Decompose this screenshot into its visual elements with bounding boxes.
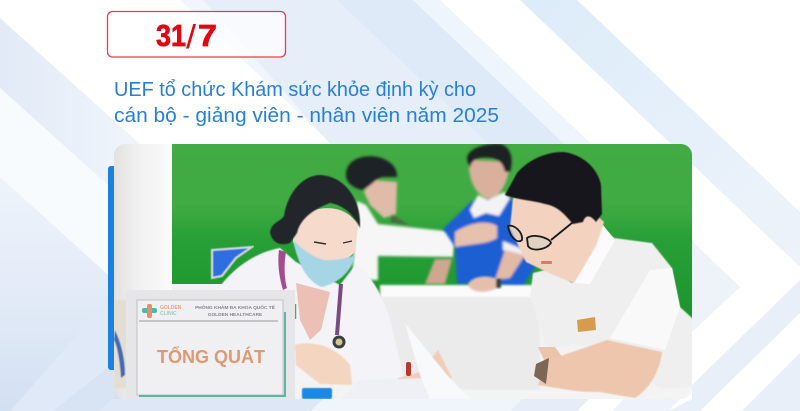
date text: 31 <box>156 18 186 53</box>
clinic name: PHÒNG KHÁM ĐA KHOA QUỐC TẾ <box>195 303 276 311</box>
desk sign: GOLDEN HEALTHCARE <box>208 312 263 318</box>
face <box>510 190 604 283</box>
upper arm <box>538 347 562 360</box>
sign label: TỔNG QUÁT <box>157 346 265 367</box>
date text: / <box>186 18 197 55</box>
polo shirt <box>530 227 692 319</box>
doctor face <box>293 208 358 261</box>
logo: CLINIC <box>160 311 177 317</box>
accent bar <box>108 166 114 370</box>
logo: GOLDEN <box>160 305 182 311</box>
forearm <box>538 340 662 398</box>
surgical mask <box>293 240 355 287</box>
back man in white coat <box>346 156 455 280</box>
blue chair <box>212 247 252 278</box>
title <box>114 79 499 127</box>
title: UEF tổ chức Khám sức khỏe định kỳ cho <box>114 79 476 101</box>
chair behind sign <box>114 300 127 388</box>
date badge <box>108 12 286 57</box>
doctor eyes <box>314 241 352 244</box>
green backdrop <box>172 144 692 319</box>
date text <box>156 18 217 55</box>
glasses <box>507 222 574 250</box>
title: cán bộ - giảng viên - nhân viên năm 2025 <box>114 105 499 127</box>
back man in blue shirt <box>425 144 537 291</box>
doctor hands <box>295 343 352 385</box>
lips <box>541 261 552 264</box>
doctor <box>216 175 452 385</box>
hair <box>505 152 602 224</box>
white table <box>378 283 538 319</box>
doctor hair <box>270 175 360 244</box>
desk sign <box>126 290 295 402</box>
back table edge <box>172 284 302 304</box>
doctor coat <box>216 248 405 382</box>
name badge <box>577 317 596 332</box>
logo <box>142 304 182 318</box>
front man <box>505 152 692 398</box>
blue man's fist and watch <box>468 277 501 292</box>
foreground paper and table <box>301 325 636 399</box>
wristwatch <box>534 358 549 384</box>
date text: 7 <box>198 18 217 53</box>
wall <box>114 144 130 399</box>
photo: health check-up scene <box>114 144 692 402</box>
